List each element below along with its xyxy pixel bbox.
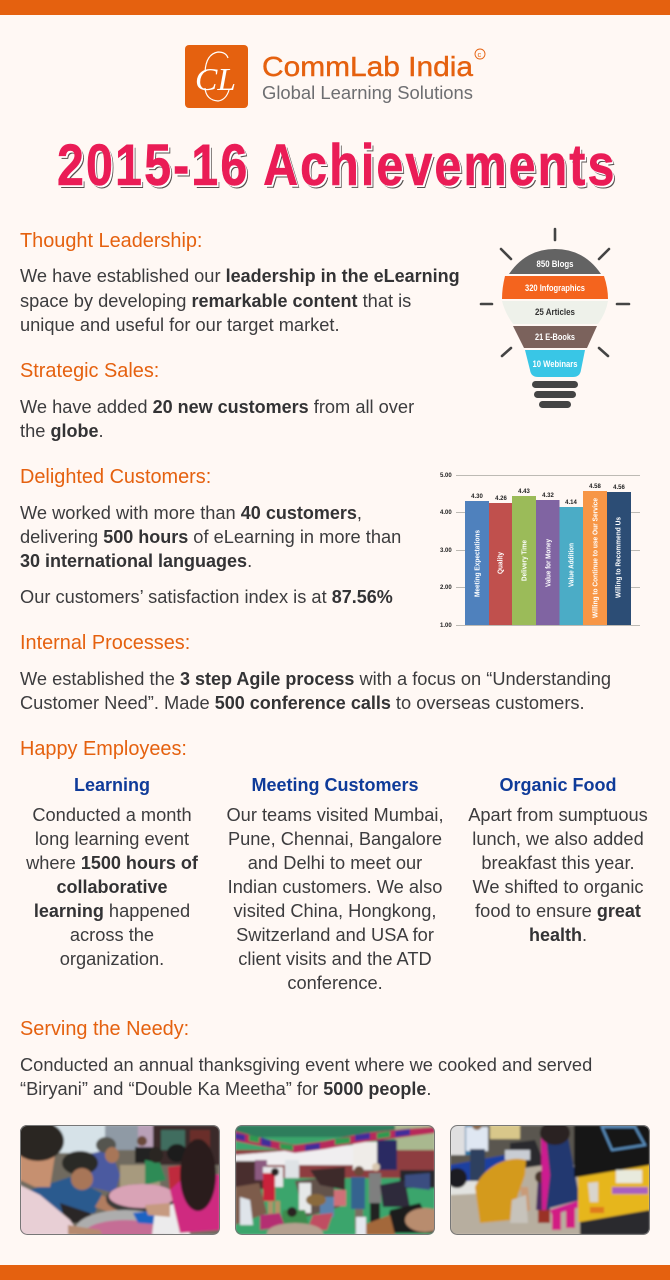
icon: light bulb of content counts: 25 Articles <box>535 307 575 317</box>
text: Thought Leadership body: We have established our leadership in the eLearning <box>20 265 460 286</box>
logo: Global Learning Solutions <box>262 83 473 103</box>
heading: Thought Leadership: Thought Leadership: <box>20 230 202 252</box>
icon: light bulb of content counts: 21 E-Books <box>535 332 575 342</box>
column: Organic Food: breakfast this year. <box>481 852 635 873</box>
text: Thought Leadership body: unique and useful for our target market. <box>20 314 340 335</box>
icon: light bulb of content counts <box>480 228 630 408</box>
column: Learning: collaborative <box>56 877 168 897</box>
bar chart: customer satisfaction: 4.56 <box>613 485 625 491</box>
text: Internal Processes body <box>20 668 611 713</box>
top orange band <box>0 0 670 15</box>
column: Meeting Customers: Switzerland and USA for <box>236 924 434 945</box>
heading: Internal Processes: Internal Processes: <box>20 632 190 654</box>
text: satisfaction index: Our customers’ satisfaction index is at 87.56% <box>20 586 393 607</box>
column: Learning: organization. <box>60 948 164 969</box>
column: Learning: long learning event <box>35 828 189 849</box>
bar chart: customer satisfaction: 2.00 <box>440 585 452 591</box>
text: Serving the Needy body: “Biryani” and “Double Ka Meetha” for 5000 people. <box>20 1078 431 1099</box>
bar chart: customer satisfaction: 5.00 <box>440 473 452 479</box>
column: Meeting Customers: Indian customers. We also <box>228 876 442 897</box>
column: Organic Food: lunch, we also added <box>472 828 644 849</box>
heading: Strategic Sales: Strategic Sales: <box>20 360 159 382</box>
bottom orange band <box>0 1265 670 1280</box>
bar chart: customer satisfaction: 4.43 <box>518 489 530 495</box>
bar chart: customer satisfaction: 1.00 <box>440 623 452 629</box>
column heading: Organic Food: Organic Food <box>500 775 616 795</box>
column: Meeting Customers: visited China, Hongkong, <box>234 900 436 921</box>
text: Delighted Customers body: delivering 500 hours of eLearning in more than <box>20 526 401 547</box>
column: Meeting Customers: client visits and the ATD <box>238 948 432 969</box>
bar chart: customer satisfaction: Willing to Recommend Us <box>616 517 622 598</box>
text: Delighted Customers body: We worked with more than 40 customers, <box>20 502 362 523</box>
text: Internal Processes body: We established the 3 step Agile process with a focus on “Understanding <box>20 668 611 689</box>
bar chart: customer satisfaction: 4.32 <box>542 493 554 499</box>
text: Thought Leadership body: space by developing remarkable content that is <box>20 290 411 310</box>
photo: women and child beside an auto rickshaw <box>450 1125 650 1235</box>
bar chart: customer satisfaction: Delivery Time <box>522 540 528 581</box>
column: Organic Food <box>468 775 648 945</box>
text: Strategic Sales body <box>20 396 414 441</box>
column heading: Meeting Customers: Meeting Customers <box>251 775 419 795</box>
logo: c <box>478 50 482 59</box>
column: Meeting Customers: and Delhi to meet our <box>248 852 422 873</box>
text: Strategic Sales body: We have added 20 new customers from all over <box>20 396 414 417</box>
heading: Serving the Needy: Serving the Needy: <box>20 1018 189 1040</box>
column: Meeting Customers: Pune, Chennai, Bangalore <box>228 828 442 849</box>
bar chart: customer satisfaction: Quality <box>498 552 504 574</box>
text: Serving the Needy body: Conducted an annual thanksgiving event where we cooked and served <box>20 1054 592 1075</box>
column: Organic Food: health. <box>529 924 587 945</box>
bar chart: customer satisfaction <box>440 472 640 629</box>
text: Delighted Customers body <box>20 502 401 571</box>
bar chart: customer satisfaction: 3.00 <box>440 548 452 554</box>
bar chart: customer satisfaction: 4.00 <box>440 510 452 516</box>
text: Strategic Sales body: the globe. <box>20 420 104 441</box>
text: Internal Processes body: Customer Need”. Made 500 conference calls to overseas customers. <box>20 692 585 713</box>
bar chart: customer satisfaction: Willing to Continue to use Our Service <box>592 498 600 618</box>
logo <box>185 45 486 108</box>
title: 2015-16 Achievements <box>57 133 617 198</box>
column: Meeting Customers <box>226 775 444 993</box>
column: Learning: Conducted a month <box>32 804 192 825</box>
photo: volunteers preparing food <box>20 1125 220 1235</box>
column: Organic Food: food to ensure great <box>475 900 641 921</box>
text: Serving the Needy body <box>20 1054 592 1099</box>
bar chart: customer satisfaction: 4.26 <box>495 496 507 502</box>
column: Organic Food: We shifted to organic <box>472 876 644 897</box>
logo: CommLab India <box>262 51 473 82</box>
bar chart: customer satisfaction: Meeting Expectations <box>474 530 482 597</box>
bar chart: customer satisfaction: Value for Money <box>546 539 552 587</box>
icon: light bulb of content counts: 850 Blogs <box>536 259 574 269</box>
column: Organic Food: Apart from sumptuous <box>468 804 648 825</box>
bar chart: customer satisfaction: 4.58 <box>589 484 601 490</box>
logo: CL <box>195 61 236 97</box>
heading: Delighted Customers: Delighted Customers: <box>20 466 211 488</box>
bar chart: customer satisfaction: 4.30 <box>471 494 483 500</box>
column: Meeting Customers: Our teams visited Mumbai, <box>226 804 444 825</box>
column: Learning: where 1500 hours of <box>26 852 198 873</box>
bar chart: customer satisfaction: 4.14 <box>565 500 577 506</box>
column: Learning <box>26 775 198 969</box>
column: Learning: across the <box>70 924 154 945</box>
icon: light bulb of content counts: 320 Infographics <box>525 283 585 293</box>
column: Meeting Customers: conference. <box>287 972 383 993</box>
photo: thanksgiving event under a tent <box>235 1125 435 1235</box>
column heading: Learning: Learning <box>74 775 150 795</box>
icon: light bulb of content counts: 10 Webinars <box>532 359 578 369</box>
bar chart: customer satisfaction: Value Addition <box>568 543 576 587</box>
text: Delighted Customers body: 30 international languages. <box>20 550 252 571</box>
column: Learning: learning happened <box>34 900 190 921</box>
heading: Happy Employees: Happy Employees: <box>20 738 187 760</box>
text: Thought Leadership body <box>20 265 460 335</box>
